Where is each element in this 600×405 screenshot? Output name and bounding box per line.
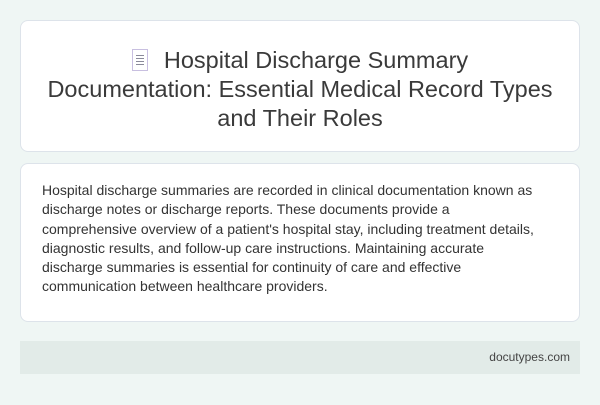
text block: description: discharge summaries is essential for continuity of care and effective <box>42 259 461 275</box>
footer bar <box>20 341 580 374</box>
text block: description: communication between healthcare providers. <box>42 278 328 294</box>
text block: description: comprehensive overview of a patient's hospital stay, including treatment details, <box>42 221 534 237</box>
title <box>47 47 553 131</box>
title: and Their Roles <box>217 105 383 131</box>
panel: title card <box>20 20 580 152</box>
icon: document <box>132 49 148 71</box>
text block: description: diagnostic results, and follow-up care instructions. Maintaining accurate <box>42 240 484 256</box>
panel: description card <box>20 163 580 322</box>
title: Documentation: Essential Medical Record Types <box>47 76 553 102</box>
text block: description: Hospital discharge summaries are recorded in clinical documentation known as <box>42 182 532 198</box>
text block: description <box>42 182 534 294</box>
footer text: source: docutypes.com <box>489 350 570 364</box>
text block: description: discharge notes or discharge reports. These documents provide a <box>42 201 450 217</box>
title: Hospital Discharge Summary <box>164 47 468 73</box>
